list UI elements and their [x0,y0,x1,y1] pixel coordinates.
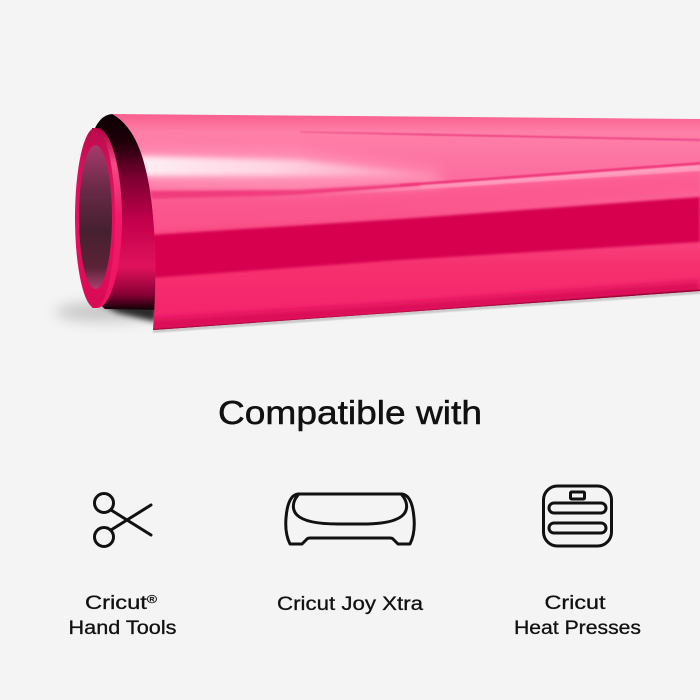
roll sheet front [100,110,700,335]
label: Cricut Hand Tools [68,593,176,639]
title: Compatible with [218,394,482,431]
label: Cricut Joy Xtra: Cricut Joy Xtra [277,594,423,615]
icon: Cricut heat press [544,486,612,546]
darker band under glare [150,183,420,199]
label: Cricut Hand Tools: Cricut [85,593,135,614]
roll hollow core [79,145,112,289]
label: Cricut Hand Tools: ® [147,594,157,606]
top light band [300,131,700,141]
icon: Cricut Joy Xtra machine [286,494,414,544]
left glare [135,148,440,192]
label: Cricut Heat Presses [514,593,641,639]
label: Cricut Heat Presses: Cricut [544,593,606,614]
roll end rim [92,128,122,308]
dark band [150,197,700,278]
ground shadow [55,290,700,333]
lighter band above dark band [257,170,700,202]
roll end ring [75,128,115,308]
bottom edge shade [150,281,700,332]
label: Cricut Heat Presses: Heat Presses [514,618,641,639]
icon: scissors [94,494,151,546]
infographic canvas [54,114,700,634]
roll inner layer [95,114,170,310]
glare streak [288,165,700,196]
label: Cricut Hand Tools: Hand Tools [68,618,176,639]
vinyl roll [75,110,700,335]
